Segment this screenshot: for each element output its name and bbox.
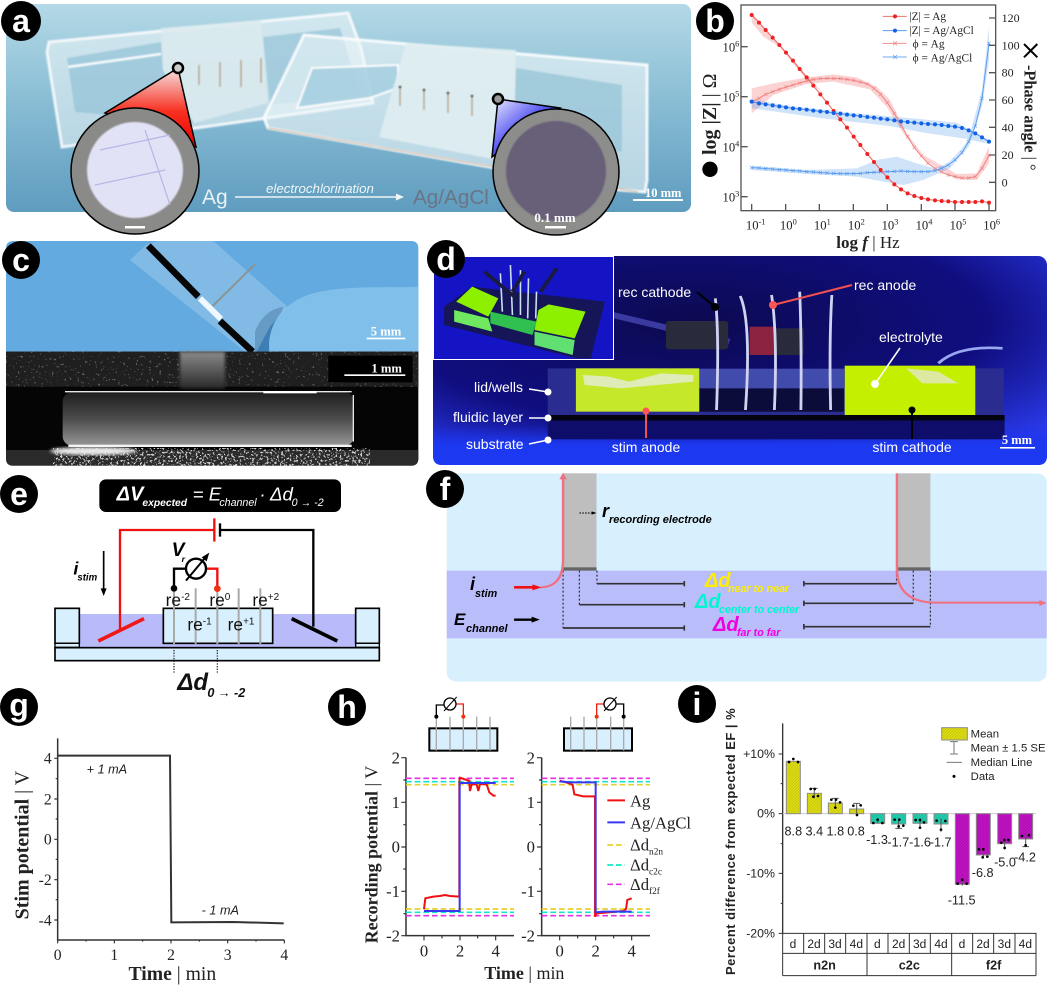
labels: electrolyte <box>879 329 943 345</box>
axes: 40 <box>1002 120 1014 134</box>
axes: 10 <box>848 218 861 232</box>
badge: d <box>427 240 465 278</box>
scale bars <box>328 325 413 382</box>
panel g: stim potential chart: 2 <box>167 947 175 964</box>
voltmeter <box>171 540 221 592</box>
panel e: circuit schematic <box>55 479 379 700</box>
schematic: right <box>564 697 632 751</box>
process labels: Ag/AgCl <box>413 186 489 209</box>
badge: i <box>678 685 716 723</box>
electrode labels <box>166 590 280 635</box>
zoom cone: silver chloride <box>492 94 560 157</box>
labels: lid/wells <box>474 379 523 395</box>
bars <box>786 761 1033 884</box>
category table: n2n <box>813 959 836 973</box>
axes: 100 <box>1002 38 1020 52</box>
dimension lines <box>563 571 930 631</box>
axes: 10 <box>916 218 928 232</box>
axes: 10 <box>746 218 759 232</box>
badge: e <box>0 475 38 513</box>
micrograph: Ag/AgCl electrode <box>493 109 619 235</box>
electrode labels: re <box>228 615 243 635</box>
distance annotation: 0 → -2 <box>207 686 245 700</box>
panel g: stim potential chart: 0 <box>44 832 52 849</box>
value labels <box>785 825 1036 908</box>
labels: rec anode <box>854 277 916 293</box>
y axis labels: -10% <box>746 866 775 880</box>
axis labels: -Phase angle | ° <box>1021 65 1040 171</box>
labels: stim <box>475 588 498 600</box>
series: |Z| Ag/AgCl <box>752 102 989 142</box>
labels: substrate <box>466 436 524 452</box>
value labels: -5.0 <box>994 856 1016 870</box>
axes: 5 <box>735 90 739 99</box>
chart: left: 0 <box>420 941 428 960</box>
chart: right: 4 <box>627 941 636 960</box>
panel h: recording potential charts: Time | min <box>484 963 564 983</box>
chart: left: 4 <box>492 941 501 960</box>
axis labels <box>699 44 1040 177</box>
category table: 3d <box>828 937 842 951</box>
axes: 10 <box>950 218 962 232</box>
axes: 2 <box>861 218 865 227</box>
category table: d <box>790 937 796 951</box>
legend: Ag/AgCl <box>630 814 691 833</box>
axes: 0 <box>793 218 797 227</box>
chart: left: 1 <box>392 793 400 812</box>
stimulation current: stim <box>77 573 98 584</box>
legend: Data <box>971 771 995 783</box>
labels <box>453 277 1035 455</box>
panel g: stim potential chart: 0 <box>54 947 62 964</box>
micrograph: Ag electrode <box>71 108 199 234</box>
electrodes <box>563 473 930 571</box>
chart: right: 2 <box>591 941 600 960</box>
chart: left: -2 <box>386 926 400 945</box>
stimulation current: i <box>73 559 79 579</box>
process labels: Ag <box>202 186 228 209</box>
legend: Δd <box>630 875 649 894</box>
electrode labels: -2 <box>181 592 190 603</box>
chart: left: 2 <box>392 748 400 767</box>
panel g: stim potential chart: 2 <box>44 791 52 808</box>
y axis labels <box>743 747 775 940</box>
legend <box>607 792 691 897</box>
chart: left: Recording potential | V <box>362 766 382 943</box>
labels: i <box>470 574 476 594</box>
current paths <box>514 473 1047 623</box>
legend: Ag <box>630 792 651 811</box>
error bars <box>811 788 1029 886</box>
labels: E <box>454 610 466 629</box>
panel i: percent difference bar chart: Percent difference from expected EF | % <box>723 708 738 975</box>
distance annotation <box>174 650 245 700</box>
formula: 0 → -2 <box>292 497 324 509</box>
axes: 20 <box>1002 148 1014 162</box>
badge: e: e <box>10 476 28 512</box>
panel g: stim potential chart: -2 <box>39 872 52 889</box>
category table: 2d <box>807 937 821 951</box>
schematic: left <box>429 697 497 751</box>
glove <box>255 287 418 352</box>
badge: i: i <box>693 686 701 722</box>
inset photo <box>434 256 614 360</box>
chart: right: 1 <box>527 793 535 812</box>
chart: left: 2 <box>456 941 464 960</box>
chart: right: 0 <box>527 838 535 857</box>
panel g: stim potential chart: -4 <box>39 912 52 929</box>
axes: 1 <box>827 218 831 227</box>
axes: 10 <box>780 218 793 232</box>
panel b: impedance chart <box>699 5 1040 232</box>
formula: = E <box>193 484 222 505</box>
stimulation current <box>73 551 107 596</box>
value labels: -11.5 <box>948 894 976 908</box>
labels: 5 mm <box>1002 433 1033 447</box>
category table: 4d <box>850 937 863 951</box>
axis labels: log |Z| | Ω <box>699 73 721 155</box>
legend: Mean <box>971 728 999 740</box>
category table: 2d <box>892 937 905 951</box>
panel g: stim potential chart: 4 <box>280 947 288 964</box>
y axis labels: -20% <box>746 926 775 940</box>
chart: right: 0 <box>556 941 564 960</box>
value labels: 8.8 <box>785 825 802 839</box>
chart: left: 0 <box>392 838 400 857</box>
badge: b <box>696 2 734 40</box>
left glass device <box>47 13 373 147</box>
series: |Z| Ag <box>752 15 989 203</box>
y axis labels: 0% <box>757 807 775 821</box>
axes: 4 <box>928 218 933 227</box>
badge: a <box>1 1 41 41</box>
process labels <box>202 181 489 209</box>
legend: c2c <box>649 868 662 878</box>
labels: channel <box>466 623 509 635</box>
category table: c2c <box>899 959 920 973</box>
formula: expected <box>142 498 188 509</box>
labels: Δd <box>712 614 739 636</box>
electrode labels: re <box>187 615 203 635</box>
process labels: electrochlorination <box>266 181 374 196</box>
voltmeter: V <box>172 540 187 561</box>
electrode labels: re <box>209 590 225 610</box>
labels: stim anode <box>612 439 680 455</box>
panel i: percent difference bar chart <box>723 708 1046 976</box>
chart: right: -1 <box>521 882 535 901</box>
legend: ϕ = Ag/AgCl <box>913 52 972 64</box>
axes: 0 <box>1002 175 1008 189</box>
formula: ΔV <box>116 484 145 506</box>
axes: 6 <box>735 40 739 49</box>
series: phase <box>752 78 989 178</box>
panel d: fluorescent device <box>433 256 1047 465</box>
category table: f2f <box>986 959 1002 973</box>
labels: fluidic layer <box>453 409 523 425</box>
axes: 10 <box>814 218 827 232</box>
electrode labels: re <box>252 590 268 610</box>
axes: 10 <box>723 190 735 204</box>
axes: 60 <box>1002 93 1014 107</box>
value labels: -4.2 <box>1014 851 1036 865</box>
axes: 10 <box>723 140 735 154</box>
legend: n2n <box>649 848 663 858</box>
axes: 6 <box>996 218 1000 227</box>
micrograph: Ag/AgCl electrode: 0.1 mm <box>534 210 576 225</box>
x label of panel b: log f | Hz <box>836 233 900 252</box>
labels: Δd <box>704 570 731 592</box>
axes <box>723 5 1020 232</box>
axes: 10 <box>983 218 996 232</box>
labels: center to center <box>719 604 800 616</box>
electrode labels: 0 <box>225 592 231 603</box>
scale bars: 1 mm <box>371 361 402 375</box>
labels: near to near <box>728 583 790 595</box>
data points <box>788 758 1030 885</box>
chart: left: -1 <box>386 882 400 901</box>
electrode labels: +1 <box>243 617 255 628</box>
labels: recording electrode <box>609 514 712 526</box>
badge: h <box>328 688 366 726</box>
category table: 3d <box>913 937 926 951</box>
legend: Mean ± 1.5 SE <box>971 742 1046 754</box>
badge: c <box>2 241 40 279</box>
value labels: -1.6 <box>909 836 931 850</box>
legend <box>942 728 1046 783</box>
axes: -1 <box>759 218 765 227</box>
vessel <box>55 608 379 661</box>
cables <box>613 315 729 342</box>
panel g: stim potential chart: Time | min <box>128 963 216 985</box>
battery wiring <box>120 518 313 629</box>
axes: 120 <box>1002 11 1020 25</box>
panel h: recording potential charts <box>362 697 691 983</box>
bands <box>752 13 989 185</box>
electrode labels: +2 <box>268 592 280 603</box>
series: phase Ag/AgCl <box>752 43 989 174</box>
value labels: -1.7 <box>887 836 909 850</box>
chart: left <box>362 748 514 960</box>
voltmeter: r <box>182 554 186 564</box>
badge: a: a <box>12 3 30 39</box>
panel a: device photo <box>6 4 691 235</box>
labels: r <box>602 501 610 521</box>
legend: Δd <box>630 836 649 855</box>
legend: f2f <box>649 886 661 897</box>
recording wires <box>715 292 832 410</box>
value labels: 1.8 <box>827 825 844 839</box>
panel c: device side view and micrograph <box>6 241 418 466</box>
labels: Δd <box>694 591 721 613</box>
glass strip <box>130 241 287 352</box>
badge: g: g <box>9 687 29 723</box>
badge: b: b <box>705 3 725 39</box>
micrograph <box>6 352 418 466</box>
badge: f <box>426 470 464 508</box>
axes: 3 <box>894 218 898 227</box>
recording electrodes <box>174 588 260 644</box>
panel g: stim potential chart: Stim potential | V <box>11 770 33 919</box>
electrode labels: re <box>166 590 181 610</box>
category table: 4d <box>1019 937 1032 951</box>
badge: h: h <box>337 689 357 725</box>
labels: stim cathode <box>872 439 952 455</box>
labels: rec cathode <box>618 284 691 300</box>
panel g: stim potential chart: - 1 mA <box>202 903 239 917</box>
panel f: distance definitions <box>447 473 1047 682</box>
electrode labels: -1 <box>203 617 212 628</box>
chart: right: 2 <box>527 748 535 767</box>
legend: Median Line <box>971 757 1032 769</box>
category table: 4d <box>934 937 948 951</box>
legend: Δd <box>630 856 649 875</box>
labels: far to far <box>737 627 781 639</box>
panel g: stim potential chart: 1 <box>110 947 118 964</box>
formula: · Δd <box>259 484 294 505</box>
category table: 3d <box>998 937 1011 951</box>
category table: d <box>959 937 965 951</box>
axes: 3 <box>735 190 739 199</box>
axes: 4 <box>735 140 740 149</box>
formula: channel <box>219 497 257 509</box>
panel g: stim potential chart <box>11 738 288 985</box>
panel g: stim potential chart: 3 <box>224 947 232 964</box>
category table: 2d <box>976 937 990 951</box>
value labels: 3.4 <box>806 825 823 839</box>
distance annotation: Δd <box>176 669 209 696</box>
legend: |Z| = Ag/AgCl <box>909 25 974 37</box>
axes: 80 <box>1002 66 1014 80</box>
panel g: stim potential chart: 4 <box>44 751 52 768</box>
badge: g <box>0 687 38 726</box>
chip <box>548 368 1004 415</box>
value labels: -1.7 <box>930 836 952 850</box>
axes: 10 <box>882 218 894 232</box>
axes: 10 <box>723 40 735 54</box>
badge: f: f <box>440 471 451 507</box>
axes: 5 <box>962 218 966 227</box>
chart: right <box>521 748 650 960</box>
zoom cone: silver <box>105 63 196 147</box>
right glass device <box>264 35 647 192</box>
scale bar 10 mm <box>633 186 683 201</box>
value labels: -6.8 <box>972 866 994 880</box>
scale bars: 5 mm <box>371 325 402 339</box>
scale bar 10 mm: 10 mm <box>645 186 682 200</box>
value labels: -1.3 <box>866 833 888 847</box>
labels <box>454 501 800 639</box>
y axis labels: +10% <box>743 747 775 761</box>
stimulation electrodes <box>98 619 337 641</box>
badge: c: c <box>12 242 30 278</box>
chart: right: -2 <box>521 926 535 945</box>
value labels: 0.8 <box>847 825 865 839</box>
legend: ϕ = Ag <box>913 39 945 51</box>
axes: 10 <box>723 90 735 104</box>
panel g: stim potential chart: + 1 mA <box>87 762 127 776</box>
legend <box>883 11 974 64</box>
category table: d <box>874 937 881 951</box>
badge: d: d <box>436 241 456 277</box>
category table <box>783 933 1036 976</box>
formula <box>99 479 341 512</box>
legend: |Z| = Ag <box>909 11 946 23</box>
